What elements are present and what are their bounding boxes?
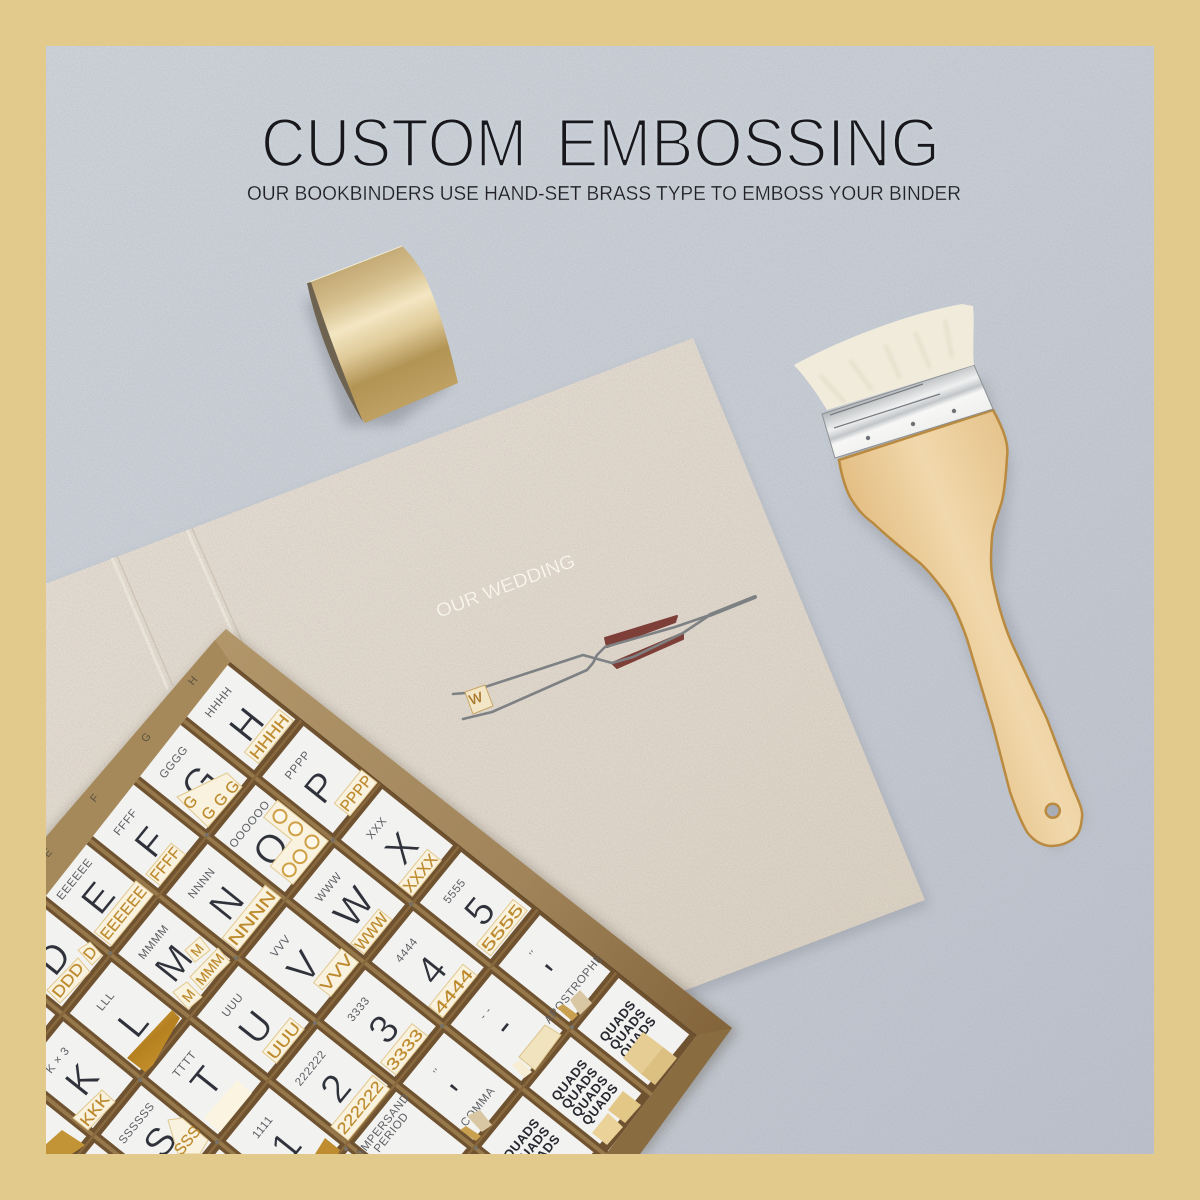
cell: quads middle: QUADS [579,1081,621,1128]
cell: 2: 222222 [293,1049,329,1089]
cell: U: UUU [265,1020,304,1063]
cell: O [230,800,329,885]
cell: 1: 1 [262,1124,311,1169]
cell: K: K [57,1056,108,1104]
cell: comma [417,1052,498,1129]
icon: gold foil tape roll [307,246,458,423]
brass: L foil [127,1010,180,1072]
frame letters [41,674,200,860]
cell: S: SSSSSS [117,1101,157,1147]
cell: P: PPPP [337,773,376,815]
cell: quads middle: QUADS [548,1056,591,1104]
cell: quads middle [548,1056,621,1128]
brass: 1 [315,1138,340,1154]
frame letters: H [186,674,200,688]
cell: M [138,924,193,982]
cell: S [117,1101,193,1175]
frame letters: E [41,847,55,860]
brass: G [177,763,243,827]
cell: 5: 5555 [479,901,527,956]
brass: D: DDD [49,960,88,1002]
cell: quads middle: QUADS [568,1073,611,1120]
cell: L: LLL [95,990,117,1013]
brass: D [47,942,102,1003]
cell: quads bottom: QUADS [510,1123,553,1171]
cell: H: HHHH [247,712,293,763]
frame letters: F [88,792,102,805]
cell: N: NNNN [186,866,218,901]
brass: M: MMM [192,950,227,988]
icon: hake brush [794,304,1082,846]
brass: S: SSS [171,1123,205,1159]
cell: 3: 3333 [346,995,373,1024]
cell: apostrophe: ' [537,957,577,991]
cell: K: K × 3 [44,1045,72,1076]
cell: N [188,868,282,952]
cell: U: U [230,1003,283,1053]
cell: M: MMMM [137,923,172,962]
brass W block [465,685,493,714]
brass: gold corner [45,1130,85,1154]
embossed text on binder: OUR WEDDING [433,551,578,623]
cell: apostrophe: ’’ [528,948,541,961]
cell: apostrophe: APOSTROPHE [543,952,606,1026]
frame letters: G [139,731,154,745]
cell: P: PPPP [283,749,313,782]
cell: T: T [182,1059,232,1105]
cell: N: NNNN [226,888,280,949]
cell: E: E [73,874,124,922]
brass O rings [272,808,320,878]
brass type blocks [45,763,677,1159]
cell: quads bottom: QUADS [500,1115,543,1163]
cell: D [46,944,67,976]
brass: apostrophe [557,990,592,1021]
cell: W: W [325,879,383,936]
brass: M: M [187,940,207,959]
cell: G: G [173,757,227,809]
cell: S: S [135,1118,186,1166]
tray frame [45,629,732,1154]
cell: 2 [286,1039,390,1140]
cell: comma: ' [442,1077,481,1111]
title: CUSTOM [261,104,527,182]
cell: V: VVV [317,951,357,995]
cell: X: XXXX [400,851,442,896]
panel: wooden type tray [15,629,732,1179]
cell: hyphen [482,1009,509,1032]
cell: U [222,993,305,1064]
cell: U: UUU [220,991,246,1020]
brass: G: G [199,803,220,824]
cell: 3: 3 [360,1007,408,1052]
cell: P [284,752,378,816]
tweezer arms [453,615,710,694]
cell: ampersand and period: PERIOD [372,1111,411,1155]
cell: P: P [296,764,347,812]
cell: W: WWW [314,870,345,905]
brass: K: KKK [77,1091,114,1130]
cell: M: M [147,937,202,990]
brush ferrule [822,365,993,458]
cell: comma: COMMA [459,1085,498,1129]
cell: quads top: QUADS [616,1014,659,1061]
cell: 5 [443,878,528,956]
cell: D: DDDD [15,923,47,958]
brass: quads top [623,1032,677,1085]
cell: V: V [278,943,330,992]
cell: L: L [109,1001,158,1046]
cell: V: VVV [269,933,294,960]
cell: 4: 4 [408,948,456,993]
cell: E: EEEEEE [55,857,95,903]
cell: 4: 4444 [394,936,421,965]
cell: quads top: QUADS [606,1005,649,1053]
cell: 1: 1111 [250,1114,276,1141]
cell: 3 [348,997,428,1076]
cell: W [314,872,392,954]
brass: G: G [180,793,202,813]
cell: quads top [596,997,659,1061]
cell: T: TTTT [171,1049,199,1080]
cell: 2: 222222 [334,1078,387,1138]
cell: X: XXX [365,815,390,842]
title: EMBOSSING [556,104,940,182]
cell: L [96,994,150,1038]
brass: G: G [211,790,232,810]
shadow: tape [305,290,450,425]
cell: F [113,808,186,886]
cell: O: OOOOOO [227,799,273,850]
cell: F: FFFF [112,807,140,838]
icon: tweezers holding W type [453,597,755,719]
cell: H [204,686,294,764]
rivets [108,833,574,1151]
cell: G: GGGG [157,744,191,781]
tray cells and walls [46,662,697,1154]
tweezer pads [605,616,677,647]
cell: F: FFFF [147,844,185,885]
cell: G [160,746,214,791]
cell: H: H [221,700,274,750]
cell: comma: ’’ [432,1066,445,1079]
cell: E [56,858,154,946]
cell: quads top: QUADS [596,997,639,1045]
brush bristles [794,304,974,410]
brass: G: G [222,778,243,798]
panel: linen binder [46,338,925,990]
cell: hyphen: - - [477,1005,495,1022]
cell: 1 [250,1114,312,1170]
brass: quads middle [592,1091,641,1145]
cell: H: HHHH [203,685,235,720]
shadow: brush [835,378,1085,852]
cell: T [171,1049,234,1108]
cell: X [366,816,442,897]
brush handle [839,410,1082,846]
cell: ampersand and period: AMPERSAND [354,1092,412,1160]
cell: W: WWW [352,910,393,954]
cell: F: F [126,819,176,866]
cell: 3: 3333 [383,1026,427,1074]
cell: 4: 4444 [431,966,477,1017]
brass W block: W [467,688,485,708]
cell: V [270,934,360,997]
cell: O: O [244,823,298,875]
brass: hyphen [512,1025,561,1078]
brass: D: D [80,944,101,963]
cell: hyphen: - [482,1007,525,1045]
cell: quads middle: QUADS [558,1064,601,1112]
brass: T [204,1080,252,1132]
brass: M [161,936,230,1009]
cell: quads bottom [500,1115,563,1179]
brass: M: M [178,986,198,1005]
subtitle: OUR BOOKBINDERS USE HAND-SET BRASS TYPE TO EMBOSS YOUR BINDER [247,183,961,205]
cell: 4 [396,938,478,1018]
cell: 5: 5 [456,889,504,934]
cell: N: N [201,879,253,928]
cell: quads bottom: QUADS [520,1132,563,1179]
title [261,104,940,182]
cell: 2: 2 [312,1066,360,1111]
brass: comma [460,1110,492,1141]
shadow: book [685,355,929,996]
cell: D: D [27,934,80,984]
cell: E: EEEEEE [98,884,151,943]
cell: 5: 5555 [442,877,469,906]
cell: K [44,1045,109,1105]
cell: X: X [377,824,428,873]
shadow: tray [45,632,738,1154]
